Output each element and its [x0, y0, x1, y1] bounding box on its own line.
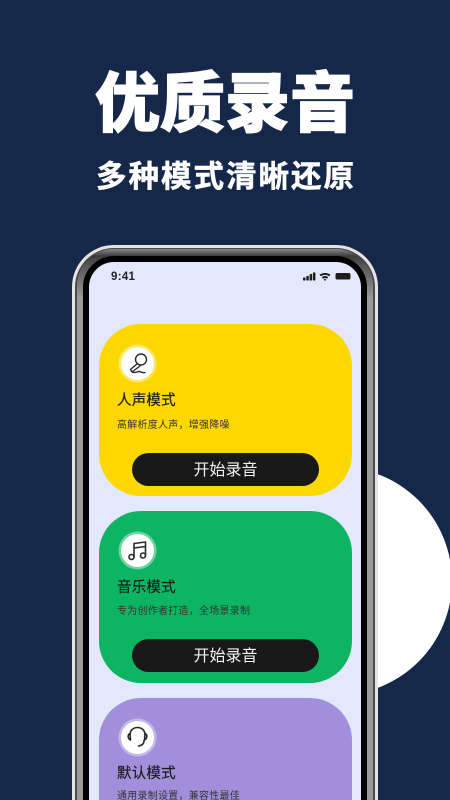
card heading: 人声模式 [117, 393, 176, 409]
start recording button: 开始录音 [193, 462, 258, 479]
card: music mode [99, 511, 352, 683]
phone mockup [72, 245, 378, 800]
card: default mode [99, 698, 352, 800]
phone dark rim [75, 248, 375, 800]
phone outer frame [72, 245, 378, 800]
title: 优质录音 [95, 67, 355, 140]
screen [89, 262, 361, 800]
card description: 专为创作者打造，全场景录制 [117, 606, 250, 617]
white background circle [224, 467, 450, 695]
status bar time: 9:41 [111, 271, 135, 283]
phone black bezel [83, 256, 367, 800]
icon: microphone [120, 346, 154, 380]
card: voice mode [99, 324, 352, 496]
icon: headset [120, 720, 154, 754]
card description: 高解析度人声，增强降噪 [117, 420, 230, 431]
card heading: 音乐模式 [117, 580, 176, 596]
start recording button: 开始录音 [193, 648, 258, 665]
start recording button [132, 453, 319, 486]
subtitle: 多种模式清晰还原 [96, 160, 356, 194]
icon: music note [120, 534, 154, 566]
phone metal band [77, 249, 373, 800]
start recording button [132, 639, 319, 672]
card heading: 默认模式 [117, 766, 176, 782]
status bar icons [303, 272, 350, 281]
